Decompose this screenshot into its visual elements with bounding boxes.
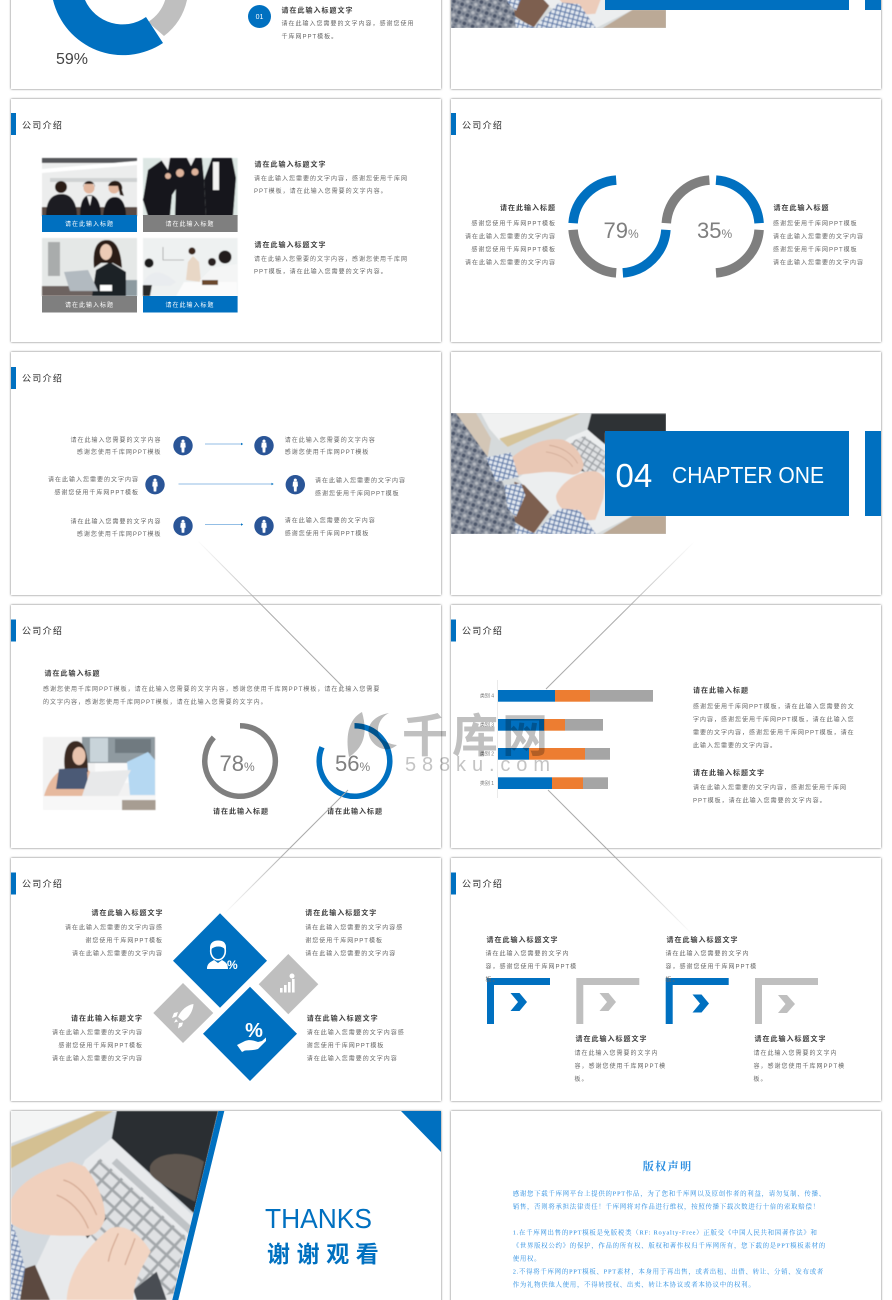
accent bar <box>11 872 16 894</box>
text blocks: flow labels: 感谢您使用千库网PPT模板 <box>285 530 369 538</box>
text block: left ring: 请在此输入您需要的文字内容 <box>465 258 556 266</box>
text block: first title <box>254 160 408 195</box>
text block: left ring <box>465 203 556 266</box>
text block: intro <box>43 668 380 706</box>
photo card: office meeting <box>143 238 238 312</box>
gray diamond: chart <box>259 954 318 1014</box>
text block: first title: 请在此输入标题 <box>693 686 749 694</box>
text block: bottom left: 请在此输入您需要的文字内容 <box>52 1054 143 1062</box>
heading: 公司介绍 <box>22 120 63 130</box>
text block: second title: PPT模板，请在此输入您需要的文字内容。 <box>693 796 827 804</box>
ring chart: 56% <box>319 726 390 796</box>
text block: top right: 请在此输入标题文字 <box>305 908 377 917</box>
text block: second title <box>254 240 408 276</box>
panel: company intro photos <box>11 99 441 342</box>
photo card: team talking <box>42 158 137 232</box>
bar chart: 类别 2 <box>480 750 494 758</box>
photo card: office meeting: 请在此输入标题 <box>165 301 215 309</box>
bar chart: 类别 3 <box>480 722 494 728</box>
text block: notice: 1.在千库网出售的PPT模板是免版税类（RF: Royalty-Free）正版受《中国人民共和国著作法》和 <box>513 1228 818 1236</box>
chapter banner <box>605 431 849 516</box>
panel: percentage rings <box>451 99 881 342</box>
bar chart: 类别 1 <box>480 780 494 787</box>
panel: chevron steps <box>451 858 881 1101</box>
text block: bottom left: 感谢您使用千库网PPT模板 <box>58 1042 143 1050</box>
text block: notice: 使用权。 <box>513 1254 541 1262</box>
value: 78%: 78% <box>220 751 255 776</box>
text block: bottom left: 请在此输入您需要的文字内容 <box>52 1028 143 1036</box>
text block: step 4: 板。 <box>754 1075 768 1083</box>
text block: top left: 请在此输入您需要的文字内容 <box>72 950 163 958</box>
panel: diamond features <box>11 858 441 1101</box>
blue diamond: person percent <box>173 913 267 1008</box>
text block: top left: 请在此输入标题文字 <box>92 908 164 917</box>
chapter banner remnant <box>605 0 881 10</box>
icon: growth bars <box>280 974 295 992</box>
value: 79%: 79% <box>604 218 639 243</box>
text block: notice: 感谢您下载千库网平台上提供的PPT作品，为了您和千库网以及原创作者的利益，请勿复制、传播、 <box>513 1188 826 1198</box>
text block: second title: 请在此输入您需要的文字内容，感谢您使用千库网 <box>254 255 408 263</box>
text block: top right <box>305 908 403 958</box>
text block: bottom right: 请在此输入您需要的文字内容感 <box>307 1028 405 1036</box>
accent bar <box>11 367 16 389</box>
text block: right ring: 请在此输入您需要的文字内容 <box>773 258 864 266</box>
text block: left ring: 感谢您使用千库网PPT模板 <box>471 246 556 254</box>
photo card: thumbs up team <box>143 158 238 232</box>
text block: right ring: 请在此输入标题 <box>774 203 830 212</box>
text block: bottom right: 请在此输入标题文字 <box>307 1014 379 1022</box>
watermark: diagonal lines <box>197 540 694 935</box>
text block: step 4: 容，感谢您使用千库网PPT模 <box>754 1062 845 1070</box>
photo: woman working at desk <box>43 737 156 810</box>
text block: intro: 请在此输入标题 <box>44 668 100 678</box>
photo: hands on keyboard <box>11 1111 218 1300</box>
accent bar <box>451 113 456 135</box>
text blocks: flow labels: 感谢您使用千库网PPT模板 <box>77 448 162 456</box>
text block: second title: 请在此输入您需要的文字内容，感谢您使用千库网 <box>693 784 847 792</box>
heading: 公司介绍 <box>462 625 503 636</box>
heading: 公司介绍 <box>462 878 503 889</box>
icon: person percent: % <box>227 958 238 972</box>
text block: second title: 请在此输入标题文字 <box>693 768 765 777</box>
text block: first title: 感谢您使用千库网PPT模板，请在此输入您需要的文 <box>693 702 855 710</box>
step 3 corner and chevron <box>666 978 729 1024</box>
photo: typing on laptop <box>451 413 666 534</box>
text block: right ring: 感谢您使用千库网PPT模板 <box>773 246 858 254</box>
text block: 01 description <box>282 6 415 40</box>
accent bar <box>451 620 456 642</box>
blue diamond: hand percent <box>203 987 297 1081</box>
text block: step 3: 容，感谢您使用千库网PPT模 <box>666 962 757 970</box>
ring chart: 35% <box>666 180 759 273</box>
text block: first title: 请在此输入您需要的文字内容，感谢您使用千库网 <box>254 174 408 182</box>
gray diamond: rocket <box>153 983 213 1043</box>
text blocks: flow labels: 感谢您使用千库网PPT模板 <box>285 448 369 456</box>
diagonal blue strip <box>172 1111 224 1300</box>
text block: second title: 请在此输入标题文字 <box>254 240 326 249</box>
title: 谢谢观看: 谢谢观看 <box>267 1241 385 1267</box>
step 1 corner and chevron <box>487 978 550 1024</box>
text block: bottom left <box>52 1014 143 1062</box>
text block: step 2: 板。 <box>574 1075 589 1083</box>
text block: top left: 谢您使用千库网PPT模板 <box>85 936 163 944</box>
heading: 公司介绍 <box>462 120 503 130</box>
text block: intro: 感谢您使用千库网PPT模板，请在此输入您需要的文字内容，感谢您使用千库网PPT模板，请在此输入您需要 <box>43 685 380 693</box>
donut percentage: 59% <box>56 51 88 68</box>
label: 56% ring: 请在此输入标题 <box>327 806 383 816</box>
accent bar <box>11 113 16 135</box>
text block: left ring: 感谢您使用千库网PPT模板 <box>471 220 556 228</box>
step 4 corner and chevron <box>755 978 818 1024</box>
number badge 01: 01 <box>256 14 263 21</box>
text blocks: flow labels: 请在此输入您需要的文字内容 <box>70 436 162 444</box>
value: 56%: 56% <box>335 751 370 776</box>
panel: thanks slide <box>11 1111 441 1300</box>
text blocks: flow labels: 请在此输入您需要的文字内容 <box>70 518 162 526</box>
ring chart: 78% <box>205 726 275 796</box>
step 2 corner and chevron <box>576 978 639 1024</box>
text block: step 1: 板。 <box>486 976 500 984</box>
chapter banner: CHAPTER ONE <box>672 462 824 488</box>
text block: notice: 销售，否则将承担法律责任！千库网将对作品进行维权，按照传播下载次数进行十倍的索取赔偿！ <box>513 1202 820 1210</box>
text block: top left <box>65 908 164 958</box>
bar chart <box>480 680 653 798</box>
text blocks: flow labels: 请在此输入您需要的文字内容 <box>285 436 376 444</box>
text block: step 3: 板。 <box>666 976 680 984</box>
side block <box>865 431 881 516</box>
text block: first title <box>693 686 855 750</box>
title: THANKS: THANKS <box>265 1203 372 1234</box>
text block: step 2: 请在此输入您需要的文字内 <box>574 1049 659 1057</box>
text block: notice: 作为礼物供他人使用，不得转授权、出卖、转让本协议或者本协议中的权利。 <box>513 1280 755 1288</box>
arrows <box>178 443 274 526</box>
text block: step 2 <box>574 1034 666 1083</box>
text block: bottom left: 请在此输入标题文字 <box>71 1014 143 1022</box>
watermark: logo and site name <box>348 710 552 776</box>
text block: first title: PPT模板，请在此输入您需要的文字内容。 <box>254 187 388 195</box>
text blocks: flow labels: 感谢您使用千库网PPT模板 <box>77 530 162 538</box>
text block: second title: PPT模板，请在此输入您需要的文字内容。 <box>254 268 388 276</box>
bar chart: 类别 4 <box>480 692 494 700</box>
panel: stacked bar chart <box>451 605 881 848</box>
text block: step 2: 容，感谢您使用千库网PPT模 <box>574 1062 666 1070</box>
text blocks: flow labels: 请在此输入您需要的文字内容 <box>285 516 376 524</box>
text block: 01 description: 请在此输入标题文字 <box>282 6 354 14</box>
watermark: logo and site name: 千库网 <box>402 710 552 762</box>
text block: bottom right <box>307 1014 405 1062</box>
panel: copyright notice <box>451 1111 881 1300</box>
text block: step 1: 请在此输入标题文字 <box>486 935 558 944</box>
accent bar <box>451 872 456 894</box>
text block: top right: 请在此输入您需要的文字内容感 <box>305 924 403 932</box>
text blocks: flow labels: 感谢您使用千库网PPT模板 <box>315 490 400 498</box>
panel: people flow <box>11 352 441 595</box>
donut chart <box>53 0 187 55</box>
text block: bottom right: 谢您使用千库网PPT模板 <box>307 1042 384 1050</box>
photo card: thumbs up team: 请在此输入标题 <box>165 220 215 228</box>
text block: first title: 字内容，感谢您使用千库网PPT模板，请在此输入您 <box>693 716 855 724</box>
heading: 公司介绍 <box>22 878 63 889</box>
text block: second title <box>693 768 847 804</box>
text block: step 4: 请在此输入标题文字 <box>754 1034 826 1043</box>
panel: top right slide with chapter banner <box>451 0 881 89</box>
text block: intro: 的文字内容，感谢您使用千库网PPT模板，请在此输入您需要的文字内。 <box>43 698 268 706</box>
text block: left ring: 请在此输入标题 <box>500 203 556 212</box>
ring chart: 79% <box>573 180 666 273</box>
text block: first title: 需要的文字内容，感谢您使用千库网PPT模板，请在 <box>693 728 855 736</box>
text block: top right: 请在此输入您需要的文字内容 <box>305 950 396 958</box>
text blocks: flow labels: 请在此输入您需要的文字内容 <box>315 476 406 484</box>
text block: step 3: 请在此输入您需要的文字内 <box>666 950 750 958</box>
value: 35%: 35% <box>697 218 732 243</box>
text block: top right: 谢您使用千库网PPT模板 <box>305 936 383 944</box>
chapter banner: 04 <box>616 457 652 494</box>
panel: intro with rings <box>11 605 441 848</box>
label: 78% ring: 请在此输入标题 <box>213 806 269 816</box>
photo card: team talking: 请在此输入标题 <box>65 220 114 228</box>
text block: notice: 2.不得将千库网的PPT模板、PPT素材，本身用于再出售，或者出租、出借、转让、分销、发布或者 <box>513 1266 824 1276</box>
text block: bottom right: 请在此输入您需要的文字内容 <box>307 1054 398 1062</box>
text blocks: flow labels: 请在此输入您需要的文字内容 <box>48 476 139 484</box>
accent bar <box>11 620 16 642</box>
text block: 01 description: 千库网PPT模板。 <box>282 32 338 40</box>
photo: typing on laptop cropped <box>451 0 666 28</box>
text block: step 3: 请在此输入标题文字 <box>666 935 738 944</box>
heading: 版权声明 <box>643 1159 693 1173</box>
text block: first title: 请在此输入标题文字 <box>254 160 326 168</box>
text block: step 1 <box>486 935 577 984</box>
text block: step 4 <box>754 1034 845 1083</box>
corner triangle <box>401 1111 441 1152</box>
panel: chapter divider <box>451 352 881 595</box>
person icons <box>145 436 305 536</box>
text block: notice <box>513 1188 826 1288</box>
text block: top left: 请在此输入您需要的文字内容感 <box>65 924 163 932</box>
text block: notice: 《世界版权公约》的保护，作品的所有权、版权和著作权归千库网所有，您下载的是PPT模板素材的 <box>513 1240 826 1250</box>
text blocks: flow labels: 感谢您使用千库网PPT模板 <box>54 488 139 496</box>
text block: step 1: 容，感谢您使用千库网PPT模 <box>486 962 577 970</box>
text block: 01 description: 请在此输入您需要的文字内容，感谢您使用 <box>282 20 415 28</box>
heading: 公司介绍 <box>22 372 63 384</box>
icon: hand percent: % <box>245 1020 263 1042</box>
icon: rocket <box>172 1004 194 1028</box>
photo card: woman at laptop <box>42 238 137 312</box>
text blocks: flow labels <box>48 436 406 538</box>
text block: step 4: 请在此输入您需要的文字内 <box>754 1049 838 1057</box>
photo card: woman at laptop: 请在此输入标题 <box>65 301 114 309</box>
text block: step 2: 请在此输入标题文字 <box>576 1034 648 1043</box>
text block: right ring: 感谢您使用千库网PPT模板 <box>773 220 858 228</box>
text block: left ring: 请在此输入您需要的文字内容 <box>465 232 556 240</box>
number badge 01 <box>248 5 271 28</box>
text block: right ring <box>773 203 864 266</box>
heading: 公司介绍 <box>22 625 63 636</box>
text block: first title: 此输入您需要的文字内容。 <box>693 742 777 750</box>
text block: step 3 <box>666 935 757 984</box>
panel: top left slide with donut <box>11 0 441 89</box>
text block: step 1: 请在此输入您需要的文字内 <box>486 950 570 958</box>
text block: right ring: 请在此输入您需要的文字内容 <box>773 232 864 240</box>
watermark: logo and site name: 588ku.com <box>405 754 550 776</box>
